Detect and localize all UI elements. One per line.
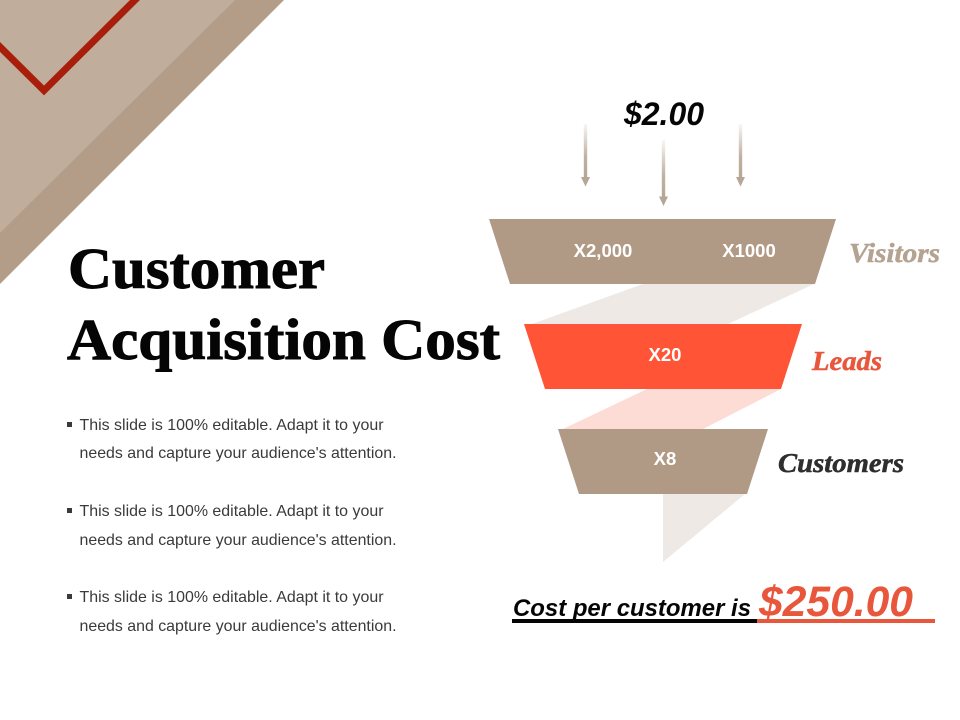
bullet 2 [67,503,396,549]
funnel tier: leads [524,324,802,389]
arrows [581,124,745,206]
bullet 1 [67,417,396,462]
funnel shadows [532,284,814,562]
title [67,236,501,372]
bullet list [67,417,396,635]
bullet 2: This slide is 100% editable. Adapt it to your [80,503,384,520]
bullet 3: This slide is 100% editable. Adapt it to your [80,589,384,606]
bullet 1: needs and capture your audience's attention. [80,445,396,462]
funnel tier: customers: X8 [654,448,676,469]
funnel tier: visitors: X1000 [722,240,776,261]
label: leads: Leads [811,346,882,376]
title: Acquisition Cost [67,307,501,372]
bullet 2: needs and capture your audience's attention. [80,532,396,549]
bullet 3: needs and capture your audience's attention. [80,618,396,635]
label: visitors: Visitors [849,238,940,268]
bullet 3 [67,589,396,635]
corner decoration [0,0,284,284]
title: Customer [68,236,325,301]
funnel tier: visitors [489,219,836,284]
funnel tier: leads: X20 [649,344,681,365]
funnel tier: visitors: X2,000 [574,240,632,261]
funnel tier: customers [558,429,768,494]
cost per customer: Cost per customer is [513,595,751,622]
price per click: $2.00 [623,96,704,132]
cost per customer [512,578,935,626]
cost per customer: $250.00 [758,578,913,626]
label: customers: Customers [778,448,904,478]
bullet 1: This slide is 100% editable. Adapt it to your [80,417,384,434]
